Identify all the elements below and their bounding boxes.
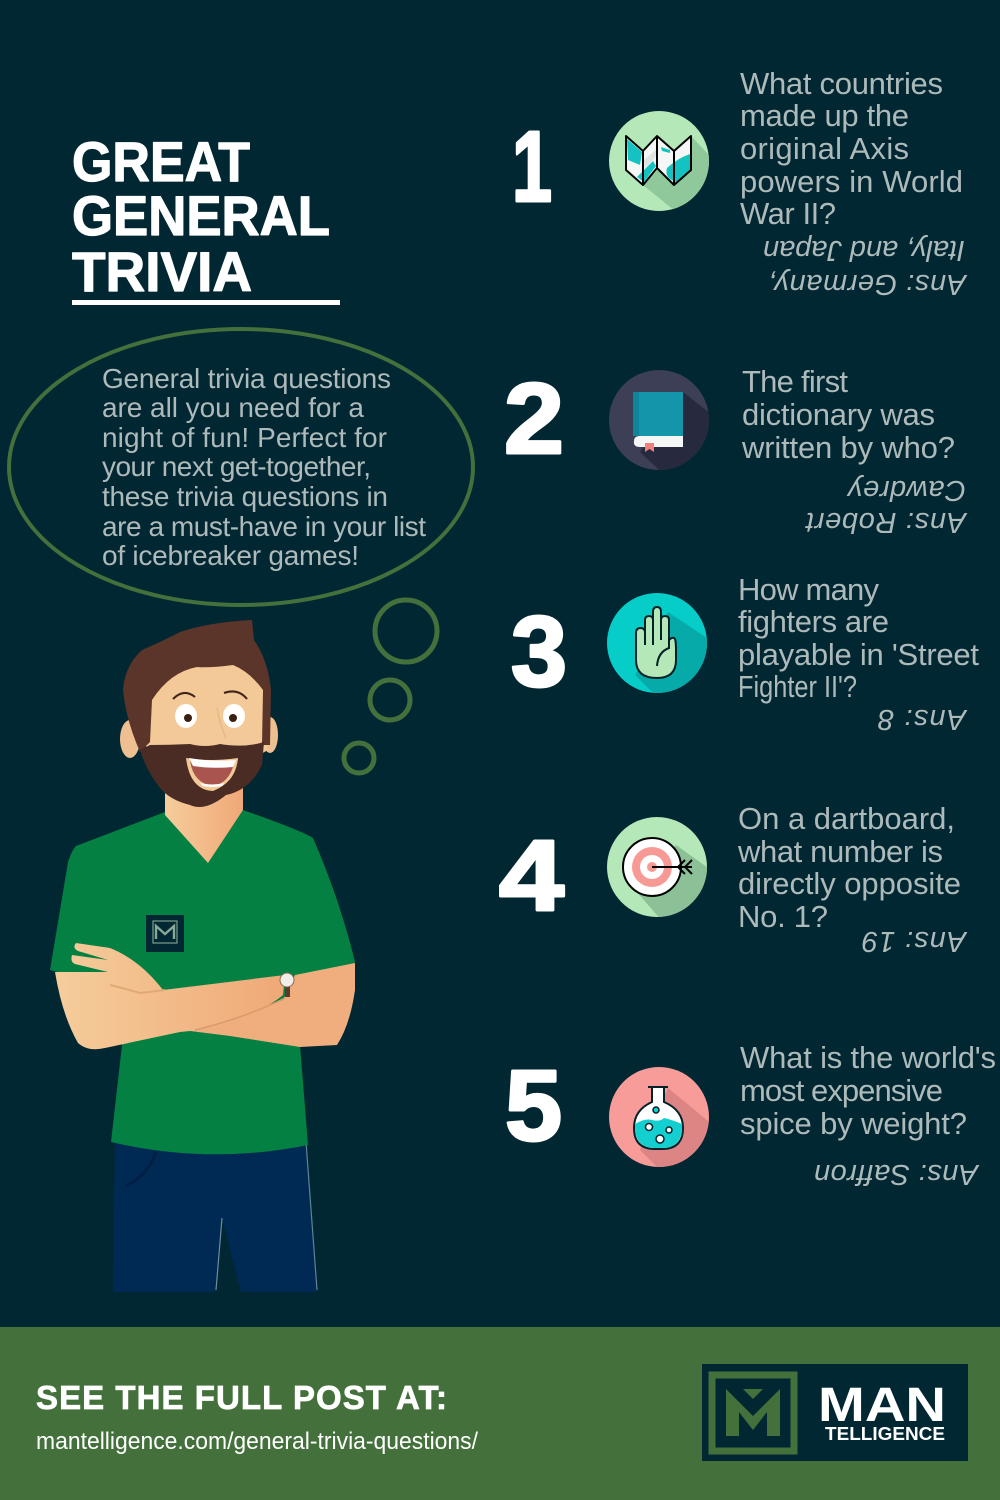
logo: MAN: [818, 1379, 946, 1432]
thought bubble: of icebreaker games!: [102, 540, 359, 571]
icon: book: [609, 370, 709, 470]
upside-down answer: Cawdrey: [846, 474, 966, 506]
title: [72, 130, 340, 305]
question text: written by who?: [741, 430, 955, 465]
icon: hand: [607, 593, 707, 693]
thought bubble trail circles: [344, 600, 437, 773]
question 3: [511, 572, 979, 735]
title: TRIVIA: [72, 240, 252, 303]
thought bubble: are all you need for a: [102, 392, 364, 423]
footer heading: SEE THE FULL POST AT:: [36, 1379, 447, 1416]
question 1: [512, 66, 968, 300]
face: [146, 650, 268, 770]
question 5: [505, 1040, 996, 1190]
hair: [123, 620, 271, 752]
thought bubble: General trivia questions: [102, 363, 391, 394]
question 4: [499, 801, 968, 957]
trousers: [113, 1135, 317, 1292]
arms crossed: [55, 943, 355, 1049]
question text: Fighter II'?: [738, 669, 857, 704]
number 4: 4: [499, 820, 564, 932]
mouth: [186, 758, 238, 791]
number 1: 1: [512, 111, 552, 223]
question text: [737, 801, 961, 934]
number 3: 3: [511, 596, 567, 708]
number 5: 5: [505, 1050, 562, 1162]
question text: most expensive: [740, 1073, 943, 1108]
question text: The first: [742, 364, 848, 399]
question text: On a dartboard,: [738, 801, 955, 836]
upside-down answer: [763, 234, 968, 300]
question text: made up the: [740, 98, 909, 133]
neck: [165, 780, 243, 863]
upside-down answer: Ans: Saffron: [814, 1158, 980, 1190]
number 2: 2: [504, 363, 564, 475]
character: bearded man in green shirt: [50, 620, 355, 1292]
eyes: [173, 691, 247, 728]
question text: No. 1?: [738, 899, 828, 934]
shirt badge logo: [146, 915, 184, 952]
question text: dictionary was: [742, 397, 935, 432]
title: GREAT: [72, 130, 250, 193]
nose line: [217, 708, 226, 738]
question 2: [504, 363, 968, 538]
question text: [738, 572, 979, 704]
question text: What is the world's: [740, 1040, 996, 1075]
upside-down answer: [804, 474, 968, 538]
thought bubble: [9, 329, 473, 605]
question text: what number is: [737, 834, 943, 869]
question text: [741, 364, 955, 465]
question text: What countries: [740, 66, 943, 101]
upside-down answer: Ans: Robert: [804, 506, 968, 538]
question text: directly opposite: [738, 866, 961, 901]
wristwatch: [280, 973, 294, 997]
footer url: mantelligence.com/general-trivia-questions/: [36, 1428, 478, 1455]
upside-down answer: Ans: 8: [878, 703, 968, 735]
question text: original Axis: [740, 131, 909, 166]
title: GENERAL: [72, 184, 330, 247]
logo: TELLIGENCE: [825, 1424, 945, 1444]
question text: How many: [738, 572, 880, 607]
thought bubble: your next get-together,: [102, 451, 371, 482]
upside-down answer: Ans: Germany,: [768, 268, 968, 300]
icon: flask: [609, 1067, 709, 1167]
beard: [140, 742, 264, 807]
question text: War II?: [740, 196, 836, 231]
shirt: [50, 810, 355, 1154]
ears: [120, 717, 278, 758]
question text: [740, 66, 963, 231]
question text: fighters are: [738, 604, 889, 639]
question text: spice by weight?: [740, 1106, 967, 1141]
question text: [740, 1040, 996, 1141]
logo: [702, 1364, 968, 1461]
question text: playable in 'Street: [738, 637, 979, 672]
thought bubble: night of fun! Perfect for: [102, 422, 387, 453]
footer band: [0, 1327, 1000, 1500]
thought bubble: are a must-have in your list: [102, 511, 426, 542]
upside-down answer: Italy, and Japan: [763, 234, 965, 266]
thought bubble: these trivia questions in: [102, 481, 388, 512]
question text: powers in World: [740, 164, 963, 199]
icon: target: [607, 817, 707, 917]
upside-down answer: Ans: 19: [862, 925, 968, 957]
icon: map: [609, 111, 709, 211]
